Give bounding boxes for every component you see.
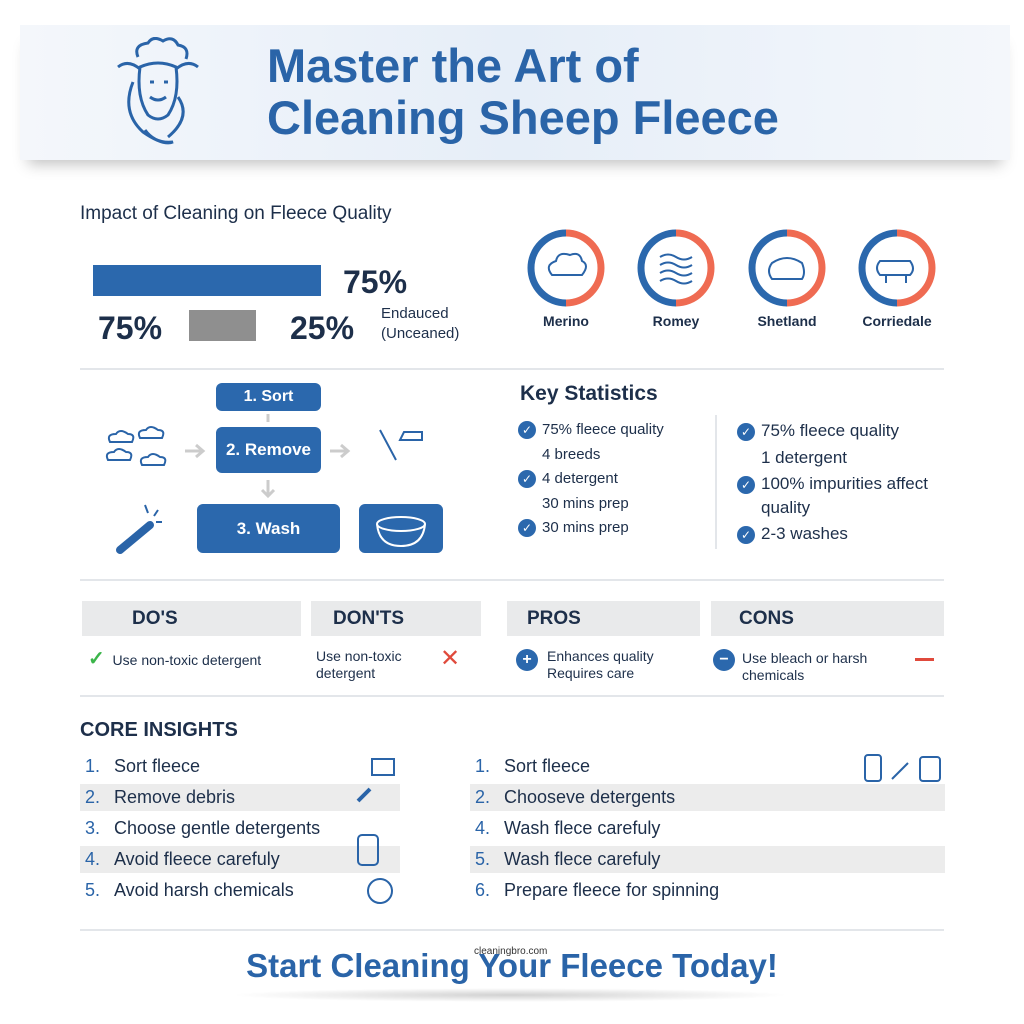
insights left: 4. [85, 849, 100, 869]
stats right: 1 detergent [761, 448, 847, 466]
stats right [737, 421, 928, 544]
insights left: 5. [85, 880, 100, 900]
stats left: 30 mins prep [542, 494, 629, 512]
do's / don'ts / pros / cons [82, 601, 944, 683]
heading: impact: Impact of Cleaning on Fleece Quality [80, 203, 392, 224]
title: Master the Art of [267, 39, 639, 92]
stats right: quality [761, 498, 810, 516]
insights left: Avoid harsh chemicals [114, 880, 294, 900]
stats right: ✓ [741, 425, 751, 439]
title: Cleaning Sheep Fleece [267, 91, 779, 144]
insights right: Prepare fleece for spinning [504, 880, 719, 900]
insights left: 2. [85, 787, 100, 807]
insights right: Chooseve detergents [504, 787, 675, 807]
do's / don'ts / pros / cons: Use bleach or harsh [742, 650, 867, 666]
insights right: 6. [475, 880, 490, 900]
insights right: Sort fleece [504, 756, 590, 776]
bar chart: Endauced [381, 305, 449, 322]
insights right: 4. [475, 818, 490, 838]
breed circles: Corriedale [862, 313, 932, 329]
stats right: 100% impurities affect [761, 474, 928, 493]
stats left [518, 421, 664, 537]
insights left: 1. [85, 756, 100, 776]
insights left: Choose gentle detergents [114, 818, 320, 838]
process flow: 2. Remove [226, 440, 311, 459]
do's / don'ts / pros / cons: chemicals [742, 667, 804, 683]
stats right: 75% fleece quality [761, 421, 899, 440]
key statistics: Key Statistics [520, 382, 658, 405]
stats right: 2-3 washes [761, 524, 848, 543]
insights left: Remove debris [114, 787, 235, 807]
do's / don'ts / pros / cons: − [719, 651, 729, 668]
insights right: 1. [475, 756, 490, 776]
do's / don'ts / pros / cons: CONS [739, 608, 794, 629]
stats left: ✓ [522, 472, 532, 486]
breed circles: Shetland [757, 313, 817, 329]
stats left: 30 mins prep [542, 519, 629, 536]
bar chart: 75% [98, 310, 162, 346]
insights left: Sort fleece [114, 756, 200, 776]
stats right: ✓ [741, 478, 751, 492]
bar chart: 25% [290, 310, 354, 346]
breed circles: Merino [543, 313, 589, 329]
do's / don'ts / pros / cons: Requires care [547, 665, 634, 681]
do's / don'ts / pros / cons: detergent [316, 665, 375, 681]
process flow: 1. Sort [244, 388, 293, 405]
bar chart: (Unceaned) [381, 325, 459, 342]
do's / don'ts / pros / cons: Use non-toxic [316, 648, 402, 664]
do's / don'ts / pros / cons: PROS [527, 608, 581, 629]
stats left: ✓ [522, 423, 532, 437]
bar chart [93, 264, 459, 346]
insights left: Avoid fleece carefuly [114, 849, 280, 869]
stats right: ✓ [741, 528, 751, 542]
breed circles: Romey [653, 313, 700, 329]
insights right [470, 754, 945, 900]
do's / don'ts / pros / cons: ✕ [440, 645, 460, 672]
do's / don'ts / pros / cons: DO'S [132, 608, 178, 629]
stats left: 4 breeds [542, 446, 600, 462]
core insights heading: CORE INSIGHTS [80, 719, 238, 741]
stats left: ✓ [522, 521, 532, 535]
do's / don'ts / pros / cons: DON'TS [333, 608, 404, 629]
do's / don'ts / pros / cons: + [522, 651, 532, 668]
header band [20, 25, 1010, 160]
insights right: 5. [475, 849, 490, 869]
insights left: 3. [85, 818, 100, 838]
process flow: 3. Wash [237, 518, 300, 538]
insights right: 2. [475, 787, 490, 807]
footer url: cleaningbro.com [474, 946, 547, 957]
do's / don'ts / pros / cons: ✓ Use non-toxic detergent [88, 648, 261, 670]
stats left: 4 detergent [542, 470, 618, 487]
icon: sheep [117, 37, 199, 144]
bar chart: 75% [343, 264, 407, 300]
process flow [106, 383, 443, 554]
stats left: 75% fleece quality [542, 421, 664, 438]
insights right: Wash flece carefuly [504, 849, 660, 869]
footer cta: Start Cleaning Your Fleece Today! [246, 947, 778, 984]
insights left [80, 756, 400, 904]
breed circles [528, 230, 936, 329]
title [267, 39, 779, 144]
insights right: Wash flece carefuly [504, 818, 660, 838]
do's / don'ts / pros / cons: Enhances quality [547, 648, 654, 664]
